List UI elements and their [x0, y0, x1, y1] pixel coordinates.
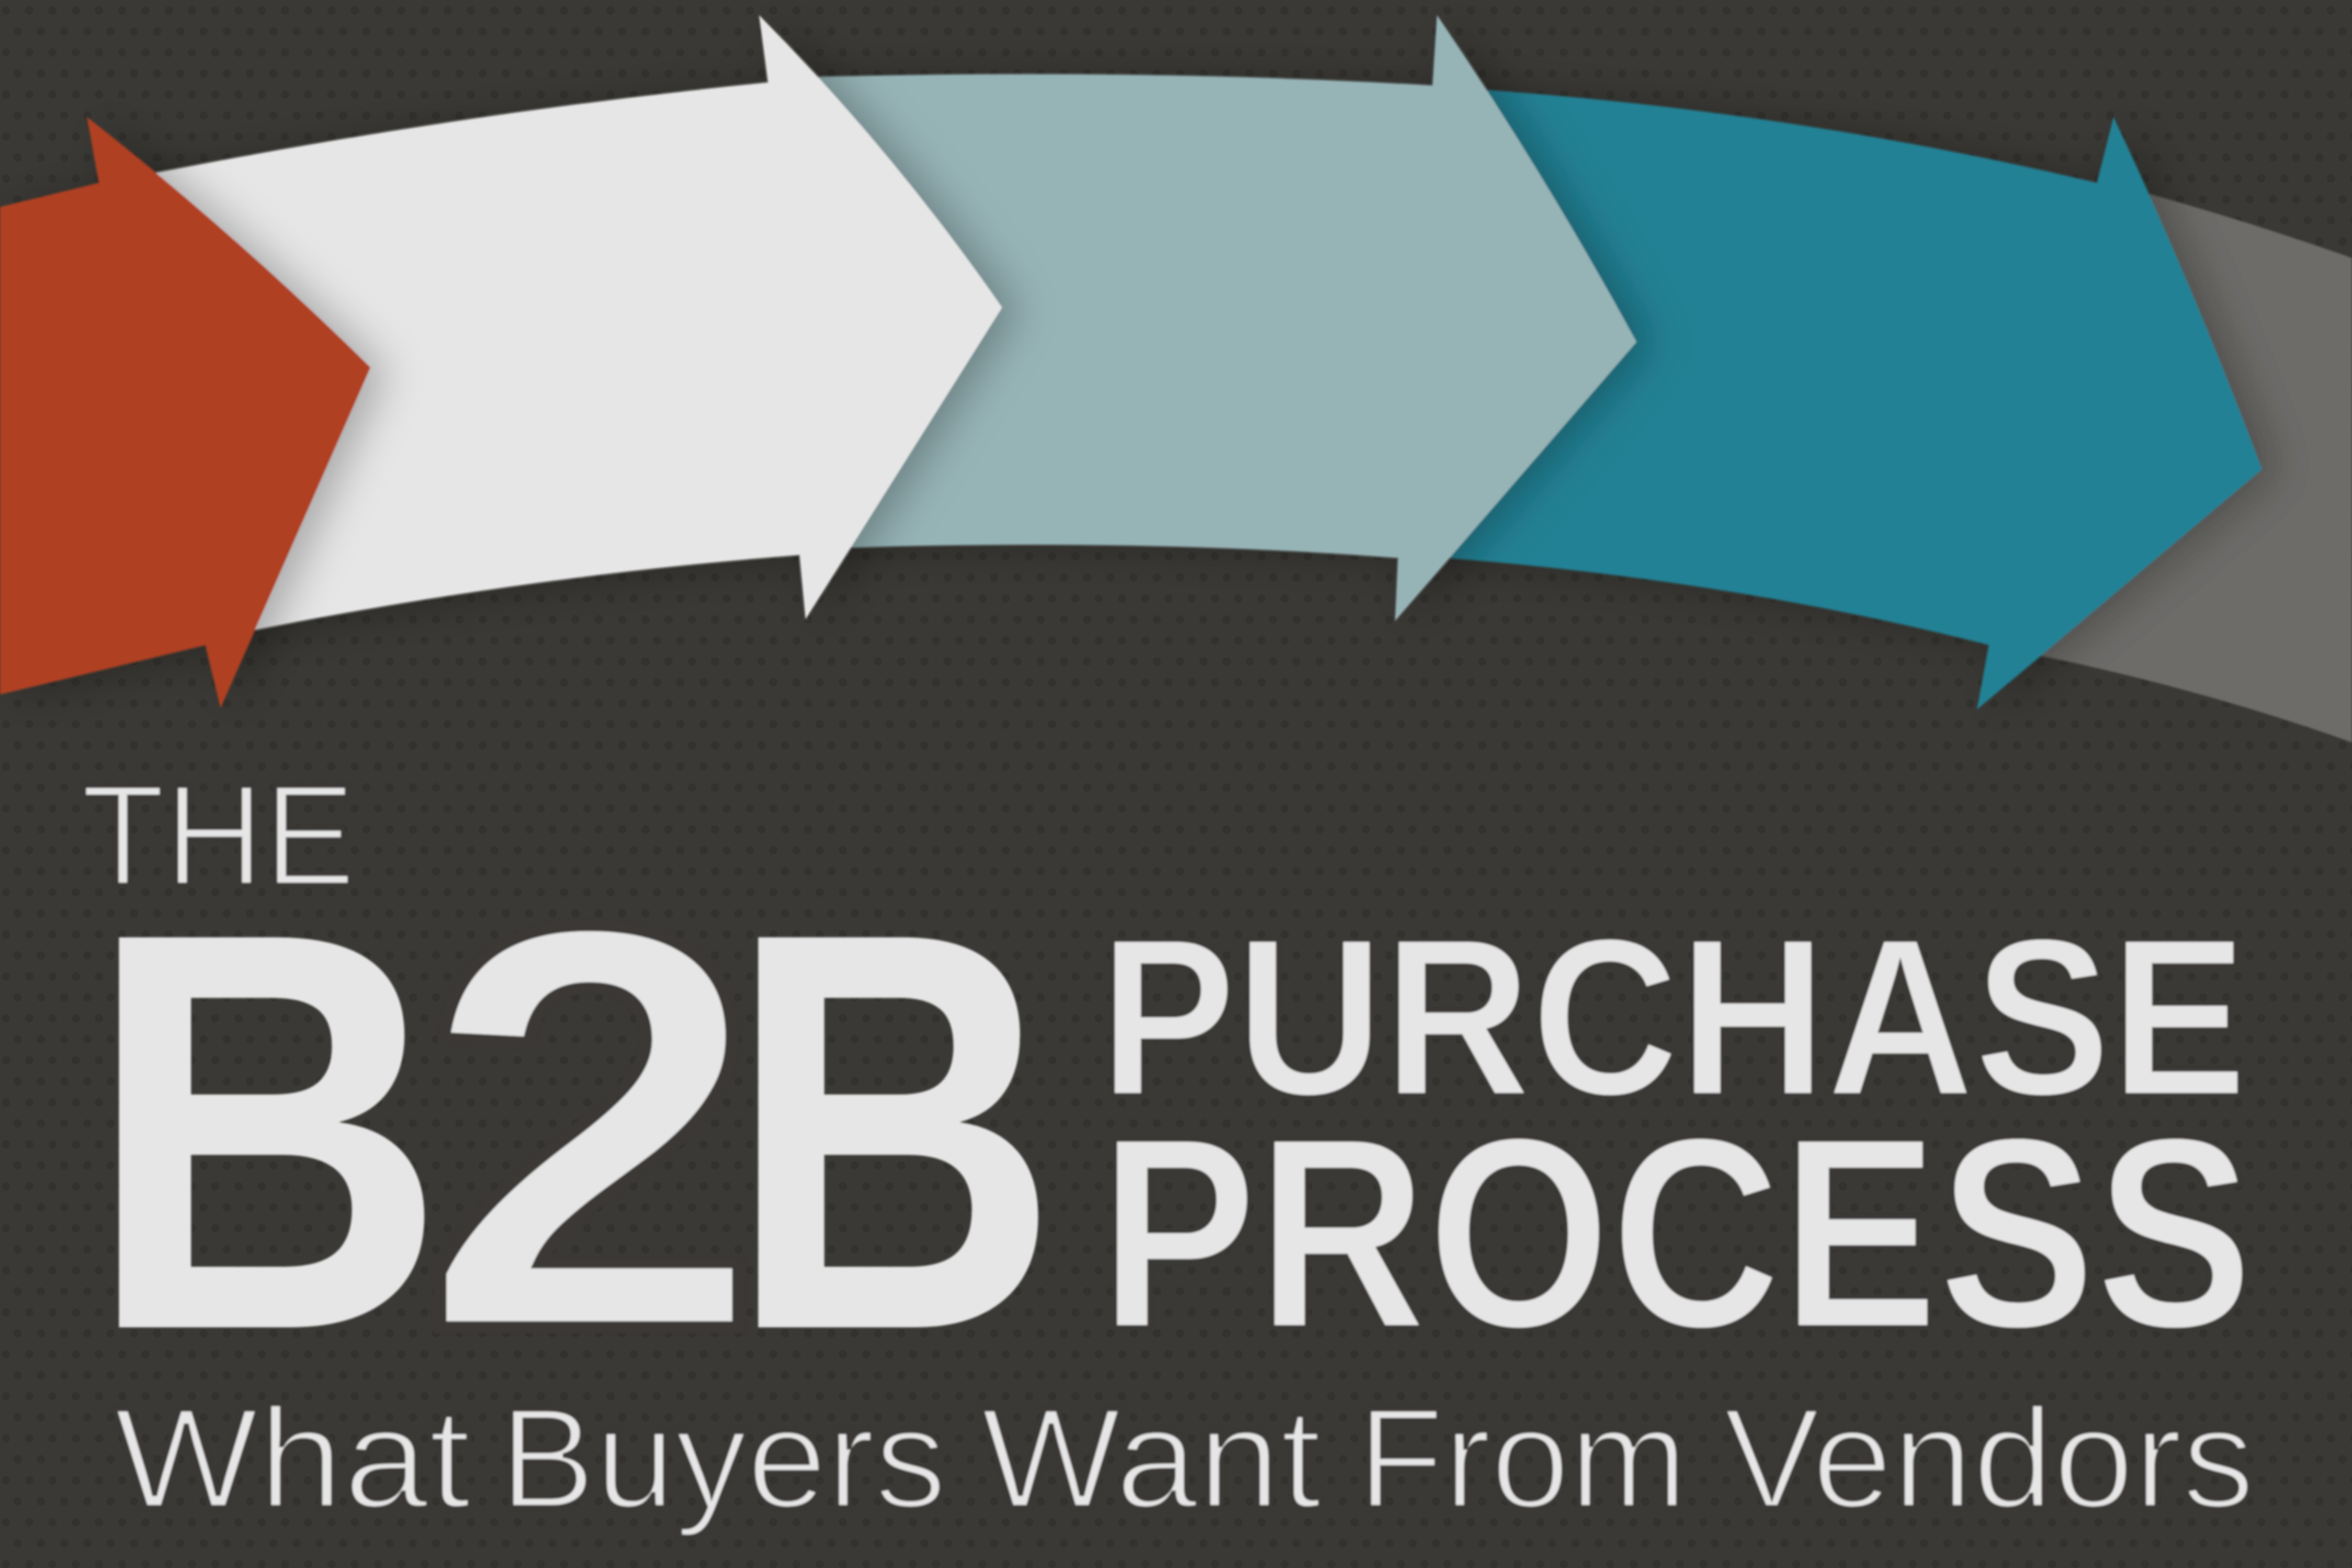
subtitle: Buyers: [500, 1379, 946, 1538]
title: B2B: B: [728, 814, 1059, 1448]
title: B2B: B: [85, 814, 447, 1448]
subtitle: From: [1358, 1379, 1688, 1538]
title: THE: THE: [81, 755, 356, 916]
title: PURCHASE: PURCHASE: [1100, 891, 2247, 1143]
arrow: red stage: [0, 117, 370, 708]
arrow band: five overlapping stages: [0, 15, 2352, 742]
subtitle: Vendors: [1724, 1379, 2255, 1538]
arrow: grey stage: [1950, 177, 2352, 742]
title: B2B: 2: [419, 806, 763, 1450]
subtitle: Want: [981, 1379, 1321, 1538]
subtitle: [114, 1379, 2255, 1538]
arrow: teal stage: [1410, 87, 2262, 709]
arrow: light teal stage: [780, 15, 1636, 621]
arrow: white stage: [120, 15, 1002, 636]
title: [81, 755, 2255, 1538]
subtitle: What: [114, 1379, 471, 1538]
title: B2B: [85, 806, 1059, 1450]
